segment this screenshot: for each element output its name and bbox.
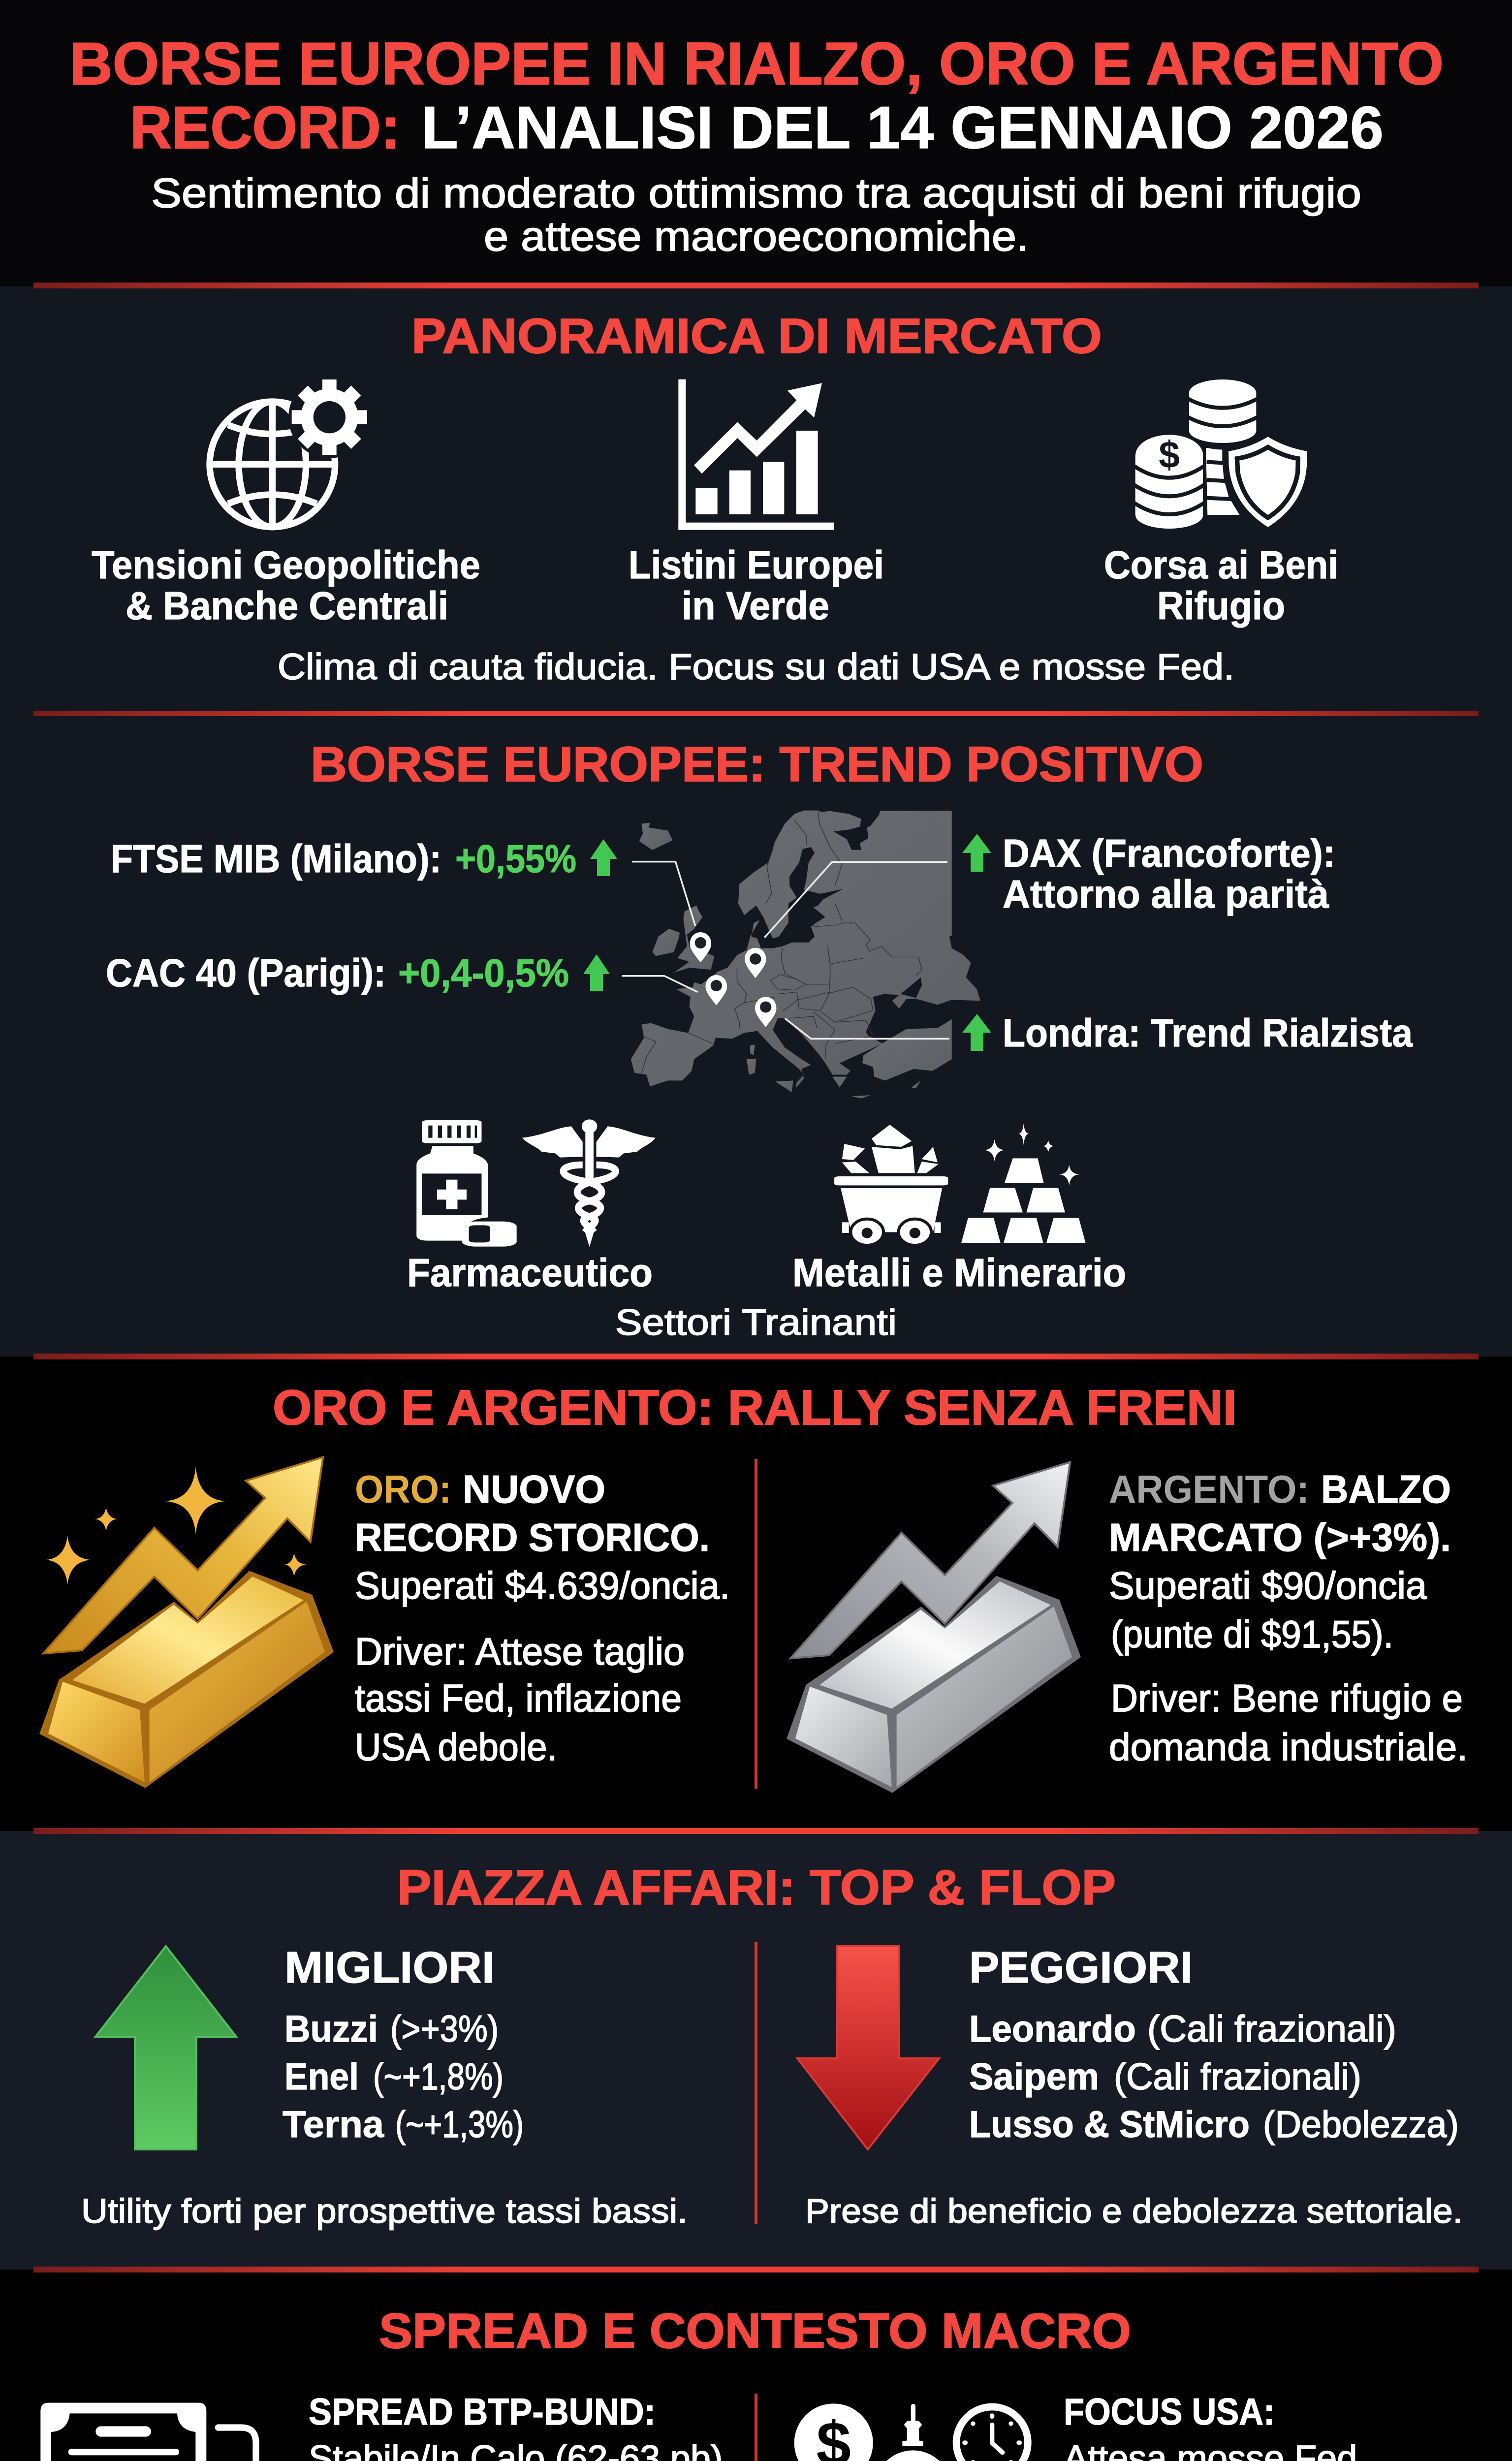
text: argento: BALZO <box>1321 1467 1451 1511</box>
text: argento: (punte di $91,55). <box>1111 1612 1393 1656</box>
text: migliori: (~+1,3%) <box>395 2104 524 2145</box>
text: peggiori: Lusso & StMicro <box>969 2104 1250 2145</box>
text: oro: RECORD STORICO. <box>355 1515 710 1559</box>
subtitle <box>151 170 1361 259</box>
text: peggiori: (Debolezza) <box>1263 2104 1459 2145</box>
icon: globe and gear <box>210 376 371 527</box>
subtitle: Sentimento di moderato ottimismo tra acquisti di beni rifugio <box>151 170 1361 216</box>
text: migliori: (>+3%) <box>390 2008 499 2050</box>
text: argento: Superati $90/oncia <box>1109 1564 1427 1607</box>
index: CAC 40: CAC 40 (Parigi): <box>106 951 386 995</box>
icon: coins and shield: $ <box>1159 435 1180 476</box>
heading: borse europee: BORSE EUROPEE: TREND POSITIVO <box>311 737 1203 792</box>
label: metalli e minerario: Metalli e Minerario <box>792 1251 1126 1294</box>
index: CAC 40 <box>106 951 610 995</box>
text: peggiori: (Cali frazionali) <box>1114 2056 1361 2098</box>
icon: gold bar with arrow <box>43 1457 330 1785</box>
divider: oro argento <box>755 1459 757 1789</box>
divider: top flop <box>755 1942 757 2224</box>
text: oro: Superati $4.639/oncia. <box>355 1564 730 1607</box>
text: migliori: Buzzi <box>284 2008 378 2050</box>
text: peggiori <box>969 1943 1459 2145</box>
icon: red down arrow <box>797 1946 939 2149</box>
icon: gold bars with sparkles <box>961 1123 1086 1243</box>
heading: panoramica: PANORAMICA DI MERCATO <box>411 309 1102 364</box>
icon: documents <box>40 2403 279 2461</box>
panel: oro e argento <box>0 1354 1512 1834</box>
text: migliori: Terna <box>283 2104 384 2145</box>
text: focus usa: FOCUS USA: <box>1064 2391 1275 2433</box>
title: BORSE EUROPEE IN RIALZO, ORO E ARGENTO <box>69 30 1444 97</box>
index: DAX: Attorno alla parità <box>1003 872 1329 916</box>
panel: panoramica di mercato <box>0 283 1512 1357</box>
label: corsa ai beni rifugio: Corsa ai Beni <box>1104 543 1338 587</box>
text: argento: MARCATO (>+3%). <box>1109 1515 1451 1559</box>
icon: caduceus <box>522 1119 656 1247</box>
text: oro: tassi Fed, inflazione <box>355 1676 682 1720</box>
index: DAX <box>962 831 1335 916</box>
text: oro <box>355 1467 730 1768</box>
text: peggiori: (Cali frazionali) <box>1147 2008 1396 2050</box>
label: tensioni geopolitiche <box>92 543 480 628</box>
text: oro: NUOVO <box>463 1467 605 1511</box>
icon: mine cart with crystals <box>834 1125 948 1245</box>
label: listini europei: in Verde <box>682 584 829 628</box>
caption: settori trainanti: Settori Trainanti <box>615 1302 897 1343</box>
text: migliori <box>283 1943 524 2145</box>
caption: clima di mercato: Clima di cauta fiducia. Focus su dati USA e mosse Fed. <box>278 646 1234 687</box>
text: migliori: (~+1,8%) <box>373 2056 504 2098</box>
label: tensioni geopolitiche: & Banche Centrali <box>126 584 448 628</box>
map pins <box>690 932 776 1027</box>
index: Londra: Londra: Trend Rialzista <box>1003 1011 1413 1055</box>
title: RECORD: <box>130 94 400 161</box>
text: oro: USA debole. <box>355 1725 557 1768</box>
icon: rising chart <box>678 379 834 530</box>
label: corsa ai beni rifugio: Rifugio <box>1157 584 1285 628</box>
text: focus usa <box>1064 2391 1461 2461</box>
text: spread <box>309 2391 733 2461</box>
panel: header <box>0 0 1512 286</box>
text: oro: Driver: Attese taglio <box>355 1630 685 1673</box>
text: peggiori: Saipem <box>969 2056 1099 2098</box>
leader lines <box>622 862 949 1039</box>
text: migliori: Enel <box>284 2056 359 2098</box>
caption: prese di beneficio: Prese di beneficio e debolezza settoriale. <box>805 2192 1463 2230</box>
text: argento: Driver: Bene rifugio e <box>1111 1676 1463 1720</box>
icon: medicine bottle <box>416 1120 517 1247</box>
panel: piazza affari <box>0 1828 1512 2270</box>
heading: spread: SPREAD E CONTESTO MACRO <box>379 2303 1131 2359</box>
text: peggiori: Leonardo <box>969 2008 1136 2050</box>
section: borse europee <box>33 711 1479 1343</box>
text: migliori: MIGLIORI <box>284 1943 495 1992</box>
text: argento: ARGENTO: <box>1109 1467 1309 1511</box>
title <box>69 30 1444 161</box>
label: corsa ai beni rifugio <box>1104 543 1338 628</box>
label: tensioni geopolitiche: Tensioni Geopolitiche <box>92 543 480 587</box>
text: argento: domanda industriale. <box>1109 1725 1468 1768</box>
index: FTSE MIB: FTSE MIB (Milano): <box>111 837 441 881</box>
text: spread: SPREAD BTP-BUND: <box>309 2391 656 2433</box>
icon: green up arrow <box>95 1946 236 2149</box>
label: listini europei: Listini Europei <box>629 543 884 587</box>
heading: oro e argento: ORO E ARGENTO: RALLY SENZA FRENI <box>273 1380 1237 1435</box>
index: CAC 40: +0,4-0,5% <box>398 951 569 995</box>
text: argento <box>1109 1467 1468 1768</box>
icon: capitol with dollar and clock <box>794 2403 1032 2461</box>
title: L’ANALISI DEL 14 GENNAIO 2026 <box>421 94 1384 161</box>
heading: piazza affari: PIAZZA AFFARI: TOP & FLOP <box>397 1860 1116 1915</box>
divider: spread usa <box>755 2394 757 2461</box>
label: farmaceutico: Farmaceutico <box>407 1251 653 1294</box>
caption: utility: Utility forti per prospettive tassi bassi. <box>81 2192 688 2230</box>
icon: coins and shield <box>1134 379 1309 529</box>
subtitle: e attese macroeconomiche. <box>484 213 1029 259</box>
icon: silver bar with arrow <box>790 1462 1077 1790</box>
label: listini europei <box>629 543 884 628</box>
index: FTSE MIB: +0,55% <box>455 837 576 881</box>
index: DAX: DAX (Francoforte): <box>1003 831 1335 875</box>
panel: spread e contesto macro <box>0 2267 1512 2461</box>
text: oro: ORO: <box>355 1467 451 1511</box>
text: peggiori: PEGGIORI <box>969 1943 1193 1992</box>
map of europe <box>622 811 980 1099</box>
